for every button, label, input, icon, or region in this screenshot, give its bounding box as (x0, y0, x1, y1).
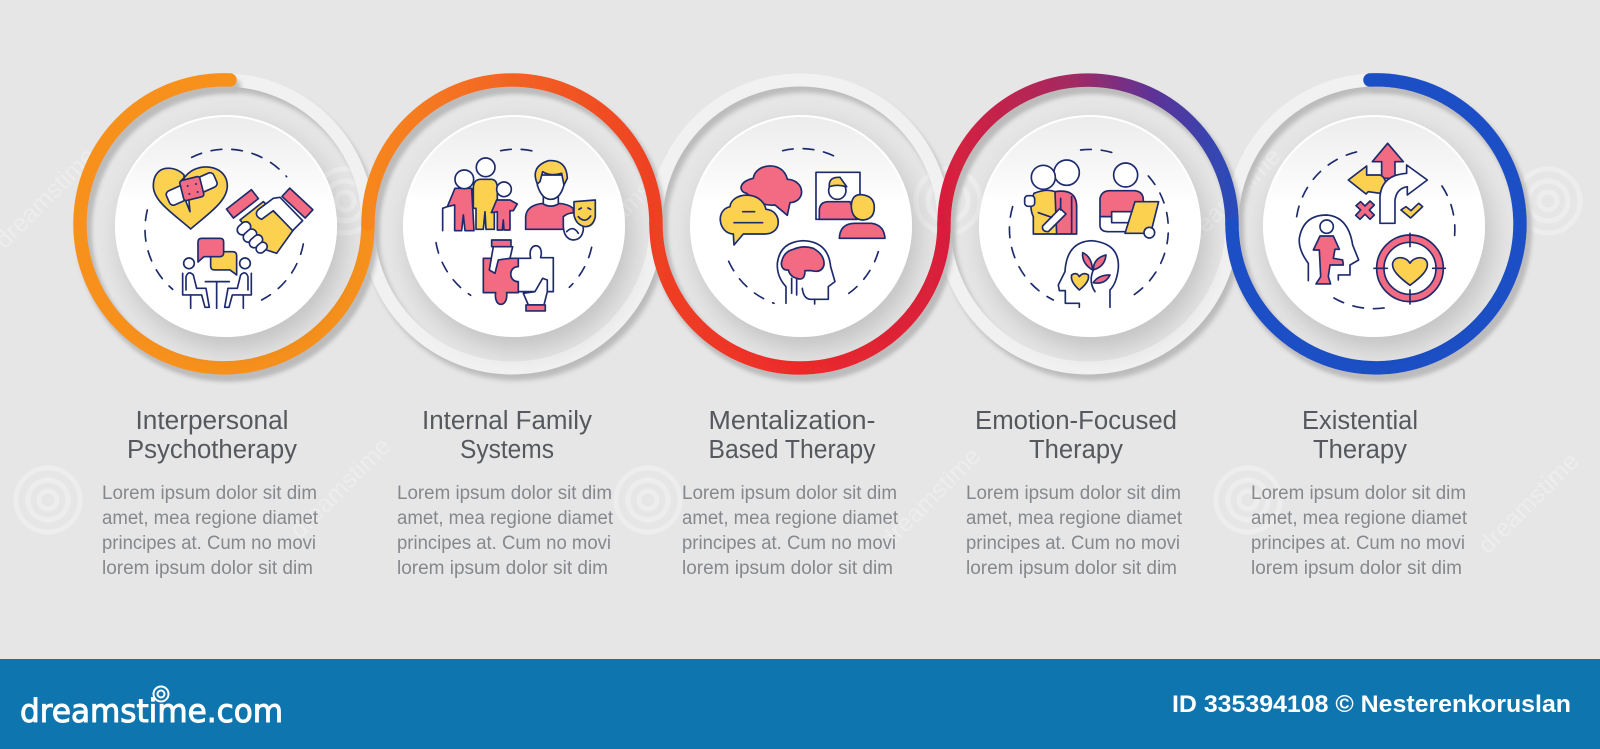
heading: interpersonal psychotherapy (127, 407, 297, 464)
column 1 text (102, 407, 319, 579)
body text 4: Lorem ipsum dolor sit dim (966, 483, 1181, 504)
body text 3: Lorem ipsum dolor sit dim (682, 483, 897, 504)
column 5 text (1251, 407, 1468, 579)
body text 5 (1251, 483, 1468, 579)
colored winding ribbon (80, 80, 1520, 368)
icon: embracing couple (1025, 160, 1079, 234)
body text 4 (966, 483, 1183, 579)
icon: puzzle with hands (483, 240, 553, 311)
white discs (116, 116, 1484, 336)
body text 3 (682, 483, 899, 579)
heading: existential therapy: Therapy (1313, 436, 1407, 464)
heading: interpersonal psychotherapy: Psychotherapy (127, 436, 297, 464)
icon: head with tree-pose figure (1299, 215, 1359, 284)
body text 1 (102, 483, 319, 579)
icon: speech clouds (720, 166, 802, 245)
body text 2: amet, mea regione diamet (397, 508, 614, 529)
column 3 text (682, 407, 899, 579)
icon group: existential therapy (1297, 143, 1455, 309)
body text 3: principes at. Cum no movi (682, 533, 896, 554)
heading: interpersonal psychotherapy: Interpersonal (136, 407, 288, 435)
icon: diverging arrows (1348, 143, 1427, 223)
body text 1: principes at. Cum no movi (102, 533, 316, 554)
base rings (80, 80, 1520, 368)
icon: video call portrait (816, 172, 885, 238)
icon: man with theatre masks (526, 161, 595, 240)
footer banner (0, 659, 1600, 749)
body text 3: amet, mea regione diamet (682, 508, 899, 529)
icon group: mentalization-based therapy (720, 149, 885, 304)
body text 2 (397, 483, 614, 579)
body text 5: principes at. Cum no movi (1251, 533, 1465, 554)
watermark: dreamstime (1472, 447, 1585, 559)
heading: mentalization-based therapy: Mentalization- (708, 407, 876, 435)
body text 5: Lorem ipsum dolor sit dim (1251, 483, 1466, 504)
body text 1: lorem ipsum dolor sit dim (102, 558, 313, 579)
body text 1: Lorem ipsum dolor sit dim (102, 483, 317, 504)
body text 1: amet, mea regione diamet (102, 508, 319, 529)
watermark: dreamstime (579, 142, 692, 254)
heading: emotion-focused therapy: Therapy (1029, 436, 1123, 464)
heading: internal family systems (422, 407, 592, 464)
watermark: dreamstime (284, 432, 397, 544)
body text 2: lorem ipsum dolor sit dim (397, 558, 608, 579)
body text 4: amet, mea regione diamet (966, 508, 1183, 529)
body text 4: principes at. Cum no movi (966, 533, 1180, 554)
icon: heart in target (1374, 233, 1445, 304)
column 4 text (966, 407, 1183, 579)
body text 5: amet, mea regione diamet (1251, 508, 1468, 529)
icon: family (443, 158, 517, 231)
icon: head with brain (777, 241, 835, 304)
icon: head with plant and heart (1058, 241, 1118, 307)
icon: two people at a table talking (183, 238, 251, 308)
heading: mentalization-based therapy: Based Therapy (708, 436, 876, 464)
body text 3: lorem ipsum dolor sit dim (682, 558, 893, 579)
column 2 text (397, 407, 614, 579)
watermark: dreamstime (1174, 142, 1287, 254)
body text 2: Lorem ipsum dolor sit dim (397, 483, 612, 504)
icon: mended heart (153, 167, 227, 229)
heading: emotion-focused therapy: Emotion-Focused (975, 407, 1177, 435)
icon: handshake (226, 188, 313, 255)
body text 4: lorem ipsum dolor sit dim (966, 558, 1177, 579)
icon group: interpersonal psychotherapy (145, 149, 313, 308)
heading: existential therapy (1302, 407, 1418, 464)
image id and credit: ID 335394108 © Nesterenkoruslan (1172, 691, 1571, 718)
heading: internal family systems: Internal Family (422, 407, 592, 435)
body text 2: principes at. Cum no movi (397, 533, 611, 554)
heading: existential therapy: Existential (1302, 407, 1418, 435)
icon group: emotion-focused therapy (1009, 149, 1168, 307)
watermark: dreamstime (874, 442, 987, 554)
body text 5: lorem ipsum dolor sit dim (1251, 558, 1462, 579)
heading: emotion-focused therapy (975, 407, 1177, 464)
watermark (0, 142, 1585, 559)
icon: person with notes (1100, 163, 1159, 238)
icon group: internal family systems (436, 149, 595, 311)
heading: internal family systems: Systems (460, 436, 554, 464)
logo: dreamstime.com (20, 692, 283, 730)
heading: mentalization-based therapy (708, 407, 876, 464)
